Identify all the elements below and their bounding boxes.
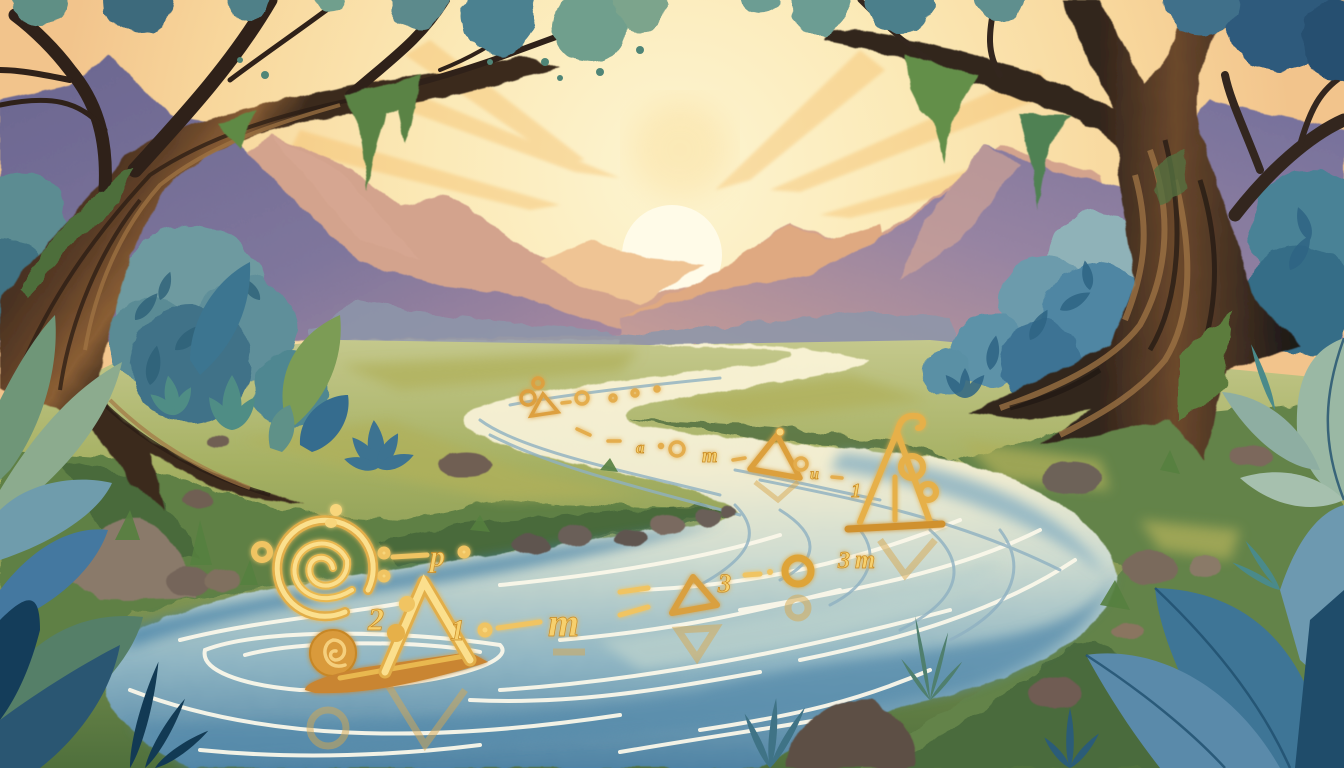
dark blue leaf <box>1155 588 1330 768</box>
hanging moss right <box>905 55 978 165</box>
mid glyph text <box>636 438 861 502</box>
rocks <box>70 436 1272 768</box>
left tree upper limbs <box>0 0 575 190</box>
river: blue-grey current lines <box>480 378 1060 640</box>
mountains: left purple range <box>0 55 650 345</box>
sun <box>622 205 722 305</box>
sun glow <box>630 100 730 200</box>
bush leaf sprigs <box>130 270 264 386</box>
tree: right <box>825 0 1344 460</box>
fern: small bottom <box>1042 708 1102 768</box>
grass tufts <box>115 450 1180 610</box>
math glyph text: 2 <box>367 601 384 637</box>
canopy left leaf dabs <box>237 46 644 81</box>
leaf veins <box>1086 338 1344 768</box>
reed: green <box>900 616 964 701</box>
pale green leaves <box>0 315 56 480</box>
small far symbol <box>521 378 558 416</box>
mid glyph text: m <box>702 445 718 467</box>
leaf: teal low <box>269 405 294 452</box>
leaf: blue broad <box>300 395 349 452</box>
left edge bush <box>0 173 70 340</box>
gold symbols: near group <box>254 504 875 693</box>
right tree trunk dark seams <box>1010 140 1214 408</box>
math glyph text: 3 <box>717 569 731 598</box>
right tree trunk highlights <box>1000 150 1187 435</box>
background bushes right <box>921 170 1344 401</box>
sun rays <box>290 40 1050 218</box>
leaf: green broad <box>282 315 341 425</box>
tall triangle symbol <box>848 416 942 529</box>
navy leaf <box>1295 590 1344 768</box>
navy leaf <box>0 600 40 720</box>
background bushes left <box>108 225 416 474</box>
canopy top left <box>14 0 666 63</box>
meadow: yellow-green patches <box>240 350 1240 560</box>
math glyph text <box>367 540 875 647</box>
pale leaves <box>1297 338 1344 500</box>
meadow: lower right mossy bank <box>860 400 1344 768</box>
gold symbols: middle group <box>521 378 942 529</box>
foreground foliage: bottom left <box>0 315 211 768</box>
right tree trunk <box>825 0 1300 460</box>
shrub: blue fern <box>343 419 416 474</box>
river: blue shading near lower reach <box>130 570 1116 768</box>
fern: teal <box>1231 343 1283 593</box>
meadow <box>0 340 1344 768</box>
formula row <box>380 548 811 635</box>
right tree side limbs <box>860 0 1344 215</box>
math glyph text: p <box>427 540 445 573</box>
fern: bottom center <box>742 698 808 768</box>
low blue leaf <box>0 645 120 768</box>
river: white ripple strokes <box>130 520 1075 755</box>
leaf: blue tall <box>190 262 250 375</box>
bush leaf sprigs right <box>942 205 1316 401</box>
triangle symbol with circle <box>750 428 800 478</box>
math glyph text: 3 <box>837 548 850 574</box>
hanging moss left <box>345 75 420 190</box>
mid glyph text: a <box>636 438 645 457</box>
river: deep blue under near bank <box>125 522 725 650</box>
math glyph text: m <box>548 600 579 645</box>
right tree moss <box>1180 310 1232 420</box>
left tree moss <box>20 165 135 300</box>
dark green leaf <box>0 616 143 768</box>
mid glyph text: u <box>810 466 819 483</box>
mid blue leaf <box>1280 505 1344 700</box>
distant tree line <box>310 298 960 348</box>
left tree bark lines <box>20 100 350 495</box>
mountains: right purple range <box>620 100 1344 345</box>
river <box>105 344 1118 768</box>
tree: left <box>0 0 575 510</box>
spiral symbol <box>254 504 373 616</box>
left tree highlight lines <box>85 105 340 488</box>
mountain highlight ridges <box>270 135 1020 280</box>
foreground foliage: bottom right <box>742 338 1344 768</box>
mid glyph text: 1 <box>851 480 861 502</box>
fern: navy <box>125 660 211 768</box>
light blue leaves <box>0 480 112 560</box>
lighter blue leaf <box>1086 653 1280 768</box>
triangle boat symbol <box>305 582 488 693</box>
math glyph text: m <box>855 545 875 574</box>
canopy top right <box>740 0 1344 80</box>
reflections of symbols <box>310 482 935 746</box>
meadow: lower left dark bank <box>0 450 730 768</box>
small dashes and rings <box>562 387 842 478</box>
snail shell symbol <box>310 630 356 676</box>
left tree trunk <box>0 55 560 510</box>
math glyph text: 1 <box>450 614 465 647</box>
shrub: small teal <box>147 374 261 434</box>
meadow: dark mossy patches <box>60 418 1200 768</box>
mountains: far peach range <box>200 135 1130 340</box>
